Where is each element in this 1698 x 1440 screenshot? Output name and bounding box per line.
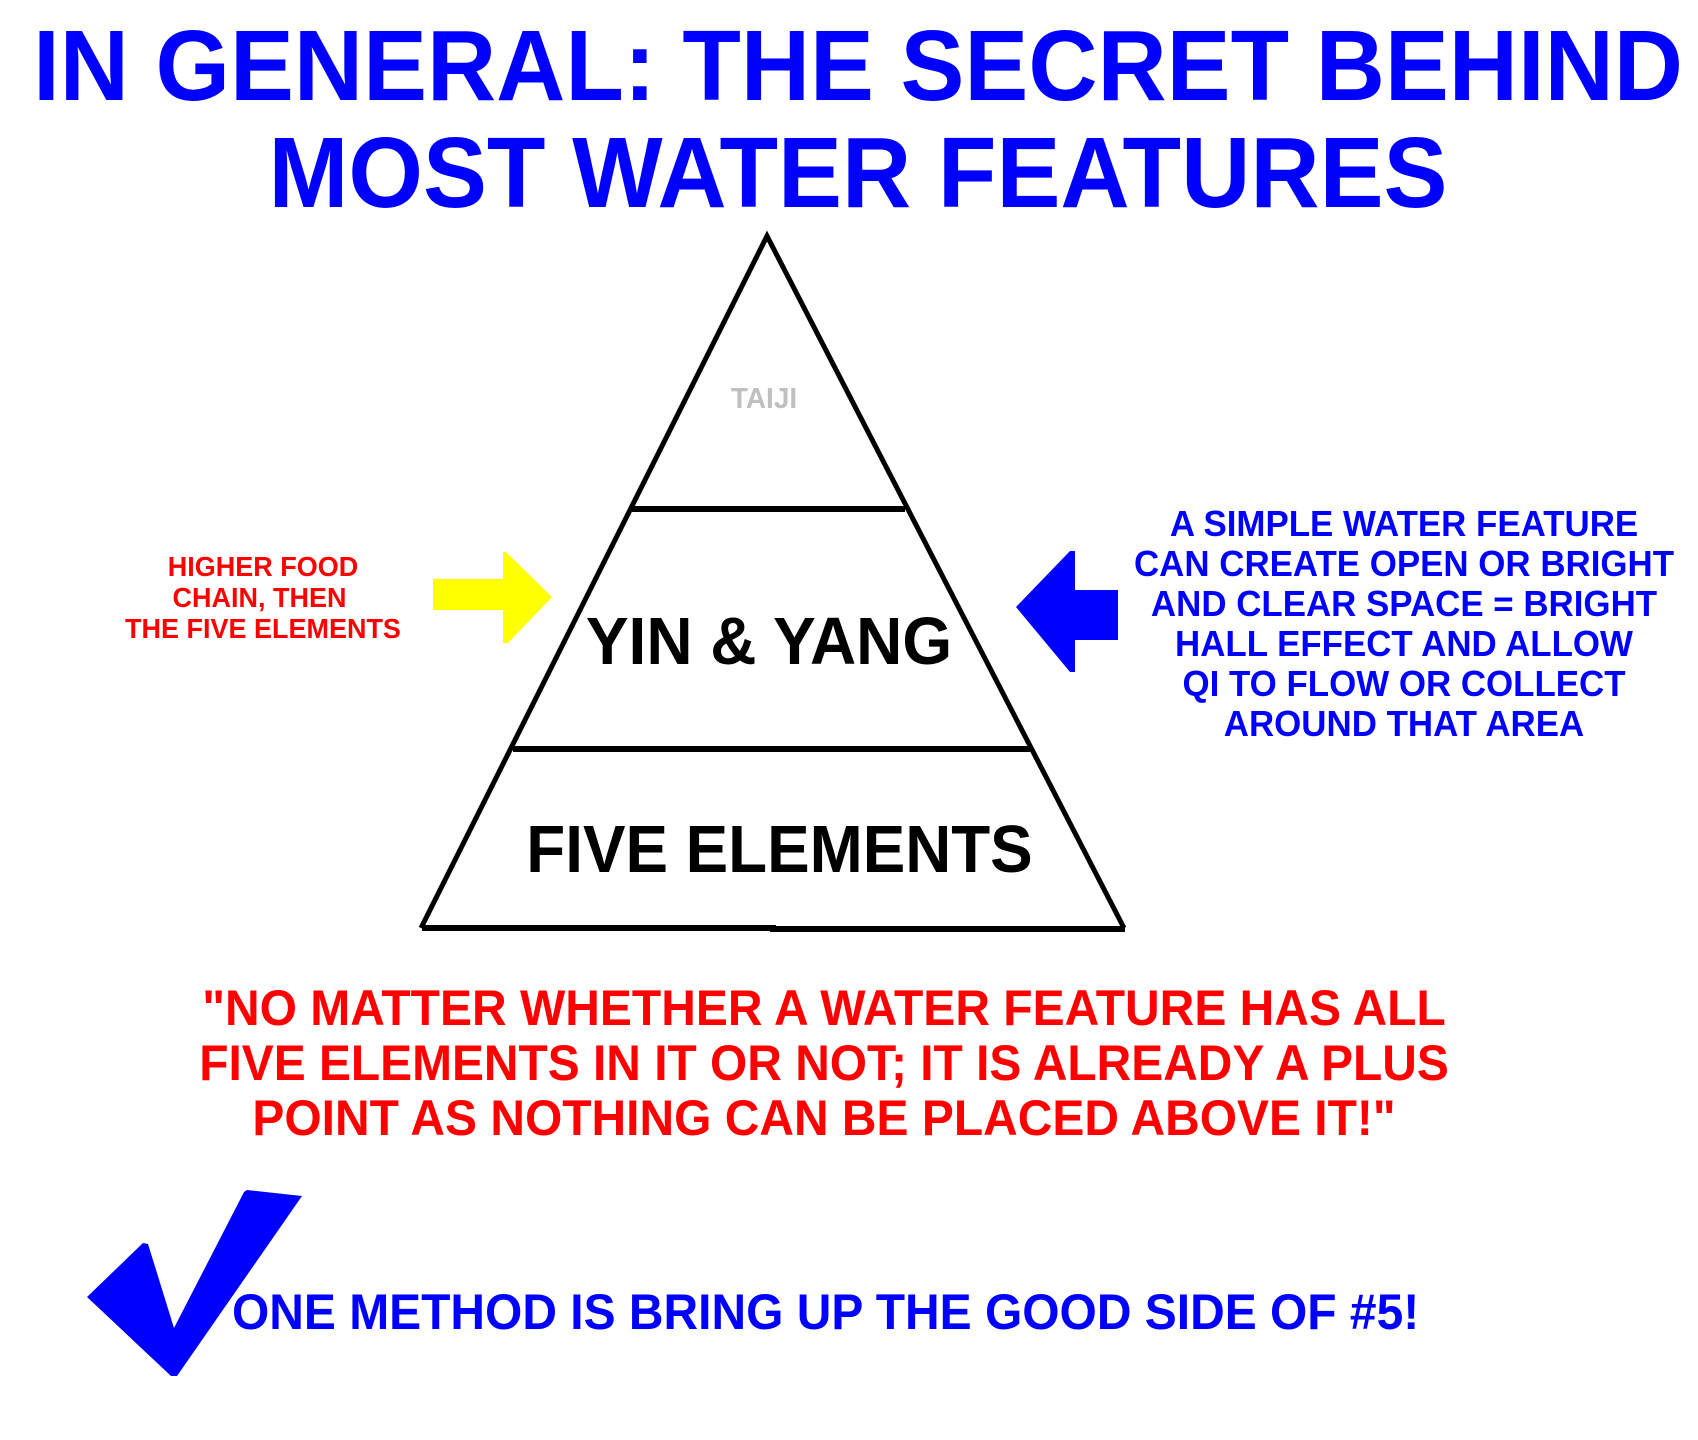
right callout text: CAN CREATE OPEN OR BRIGHT: [1134, 543, 1674, 584]
left callout text: CHAIN, THEN: [173, 582, 346, 613]
left callout text: THE FIVE ELEMENTS: [125, 613, 401, 644]
red quote: [199, 981, 1449, 1146]
title: [33, 9, 1683, 228]
arrow: yellow pointing right: [433, 552, 552, 643]
arrow: blue pointing left: [1016, 551, 1118, 672]
right callout text: [1134, 503, 1674, 744]
title: IN GENERAL: THE SECRET BEHIND: [33, 9, 1683, 121]
right callout text: HALL EFFECT AND ALLOW: [1175, 623, 1633, 664]
red quote: POINT AS NOTHING CAN BE PLACED ABOVE IT!": [252, 1091, 1396, 1146]
left callout text: [125, 551, 401, 644]
red quote: FIVE ELEMENTS IN IT OR NOT; IT IS ALREADY A PLUS: [199, 1036, 1449, 1091]
pyramid label: taiji: TAIJI: [731, 383, 797, 415]
right callout text: AROUND THAT AREA: [1224, 703, 1584, 744]
bottom statement: ONE METHOD IS BRING UP THE GOOD SIDE OF #5!: [232, 1285, 1419, 1340]
pyramid label: five elements: FIVE ELEMENTS: [526, 812, 1033, 886]
right callout text: QI TO FLOW OR COLLECT: [1182, 663, 1626, 704]
title: MOST WATER FEATURES: [268, 116, 1448, 228]
icon: blue check mark: [87, 1190, 302, 1376]
pyramid diagram: [421, 236, 1125, 929]
right callout text: A SIMPLE WATER FEATURE: [1170, 503, 1638, 544]
left callout text: HIGHER FOOD: [168, 551, 358, 582]
right callout text: AND CLEAR SPACE = BRIGHT: [1151, 583, 1657, 624]
red quote: "NO MATTER WHETHER A WATER FEATURE HAS ALL: [202, 981, 1446, 1036]
pyramid label: yin and yang: YIN & YANG: [586, 604, 952, 678]
